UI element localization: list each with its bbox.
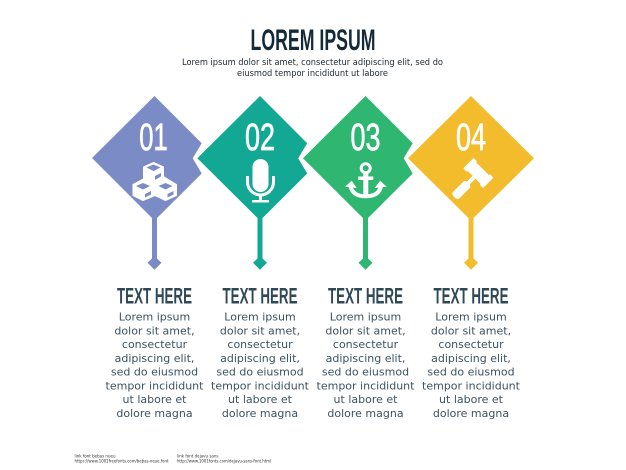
icon: gavel [444,158,493,207]
column 1 body: tempor incididunt [106,379,204,392]
footer font credits: http://www.1001fonts.com/dejavu-sans-font.html [177,458,271,464]
column 2 body: Lorem ipsum [224,311,296,324]
subtitle: Lorem ipsum dolor sit amet, consectetur adipiscing elit, sed do [182,58,443,68]
footer font credits: link font bebas nueu [74,454,116,458]
column 2 body: consectetur [227,338,293,351]
subtitle [182,58,443,79]
step 1 number: 01 [139,117,168,159]
icon: cubes [133,162,176,200]
column 1 body [106,311,204,420]
step 3 diamond and pin [303,96,413,270]
icon: microphone [248,159,274,202]
step 3 [303,96,413,270]
column 1 body: Lorem ipsum [119,311,190,324]
column 4 body: dolore magna [433,407,509,420]
footer font credits [74,454,271,464]
column 1 heading: TEXT HERE [117,284,192,308]
column 3 body: ut labore et [334,393,398,406]
step 2 [197,96,307,270]
column 3 body [317,311,415,420]
step 2 number: 02 [245,117,275,159]
column 1 text [106,284,204,420]
column 2 body: adipiscing elit, [220,352,300,365]
column 1 body: dolor sit amet, [114,324,195,338]
column 4 body [422,311,521,420]
column 4 body: adipiscing elit, [431,352,511,365]
icon: anchor [345,164,387,197]
column 3 heading: TEXT HERE [328,284,403,308]
step 4 [408,96,534,270]
column 4 body: tempor incididunt [422,379,521,392]
step 3 number: 03 [350,117,380,159]
column 2 body: tempor incididunt [211,379,310,392]
step 1 diamond and pin [92,96,202,270]
column 3 body: sed do eiusmod [322,366,409,379]
column 2 body: sed do eiusmod [216,366,304,379]
column 3 body: Lorem ipsum [330,311,401,324]
column 3 text [317,284,415,420]
column 2 body: ut labore et [228,393,293,406]
column 4 body: sed do eiusmod [427,366,515,379]
column 4 body: ut labore et [439,393,504,406]
column 2 text [211,284,310,420]
column 2 body: dolore magna [222,407,298,420]
footer font credits: https://www.1001freefonts.com/bebas-neue.font [74,458,169,464]
column 3 body: adipiscing elit, [326,352,405,365]
column 4 body: dolor sit amet, [431,324,511,338]
column 1 body: sed do eiusmod [111,366,198,379]
footer font credits: link font dejavu sans [177,454,218,458]
column 3 body: dolor sit amet, [325,324,406,338]
column 4 text [422,284,521,420]
column 2 heading: TEXT HERE [222,284,298,308]
column 3 body: tempor incididunt [317,379,415,392]
step 1 [92,96,202,270]
step 4 number: 04 [456,117,486,159]
column 3 body: consectetur [333,338,399,351]
column 1 body: consectetur [122,338,188,351]
step 2 diamond and pin [197,96,307,270]
column 4 body: Lorem ipsum [435,311,507,324]
column 1 body: ut labore et [123,393,187,406]
column 4 body: consectetur [438,338,504,351]
column 1 body: adipiscing elit, [115,352,194,365]
step 4 diamond and pin [408,96,534,270]
column 2 body: dolor sit amet, [220,324,300,338]
subtitle: eiusmod tempor incididunt ut labore [237,69,388,79]
column 4 heading: TEXT HERE [434,284,508,308]
title: LOREM IPSUM [250,24,376,57]
column 1 body: dolore magna [116,407,193,420]
column 2 body [211,311,310,420]
column 3 body: dolore magna [327,407,404,420]
